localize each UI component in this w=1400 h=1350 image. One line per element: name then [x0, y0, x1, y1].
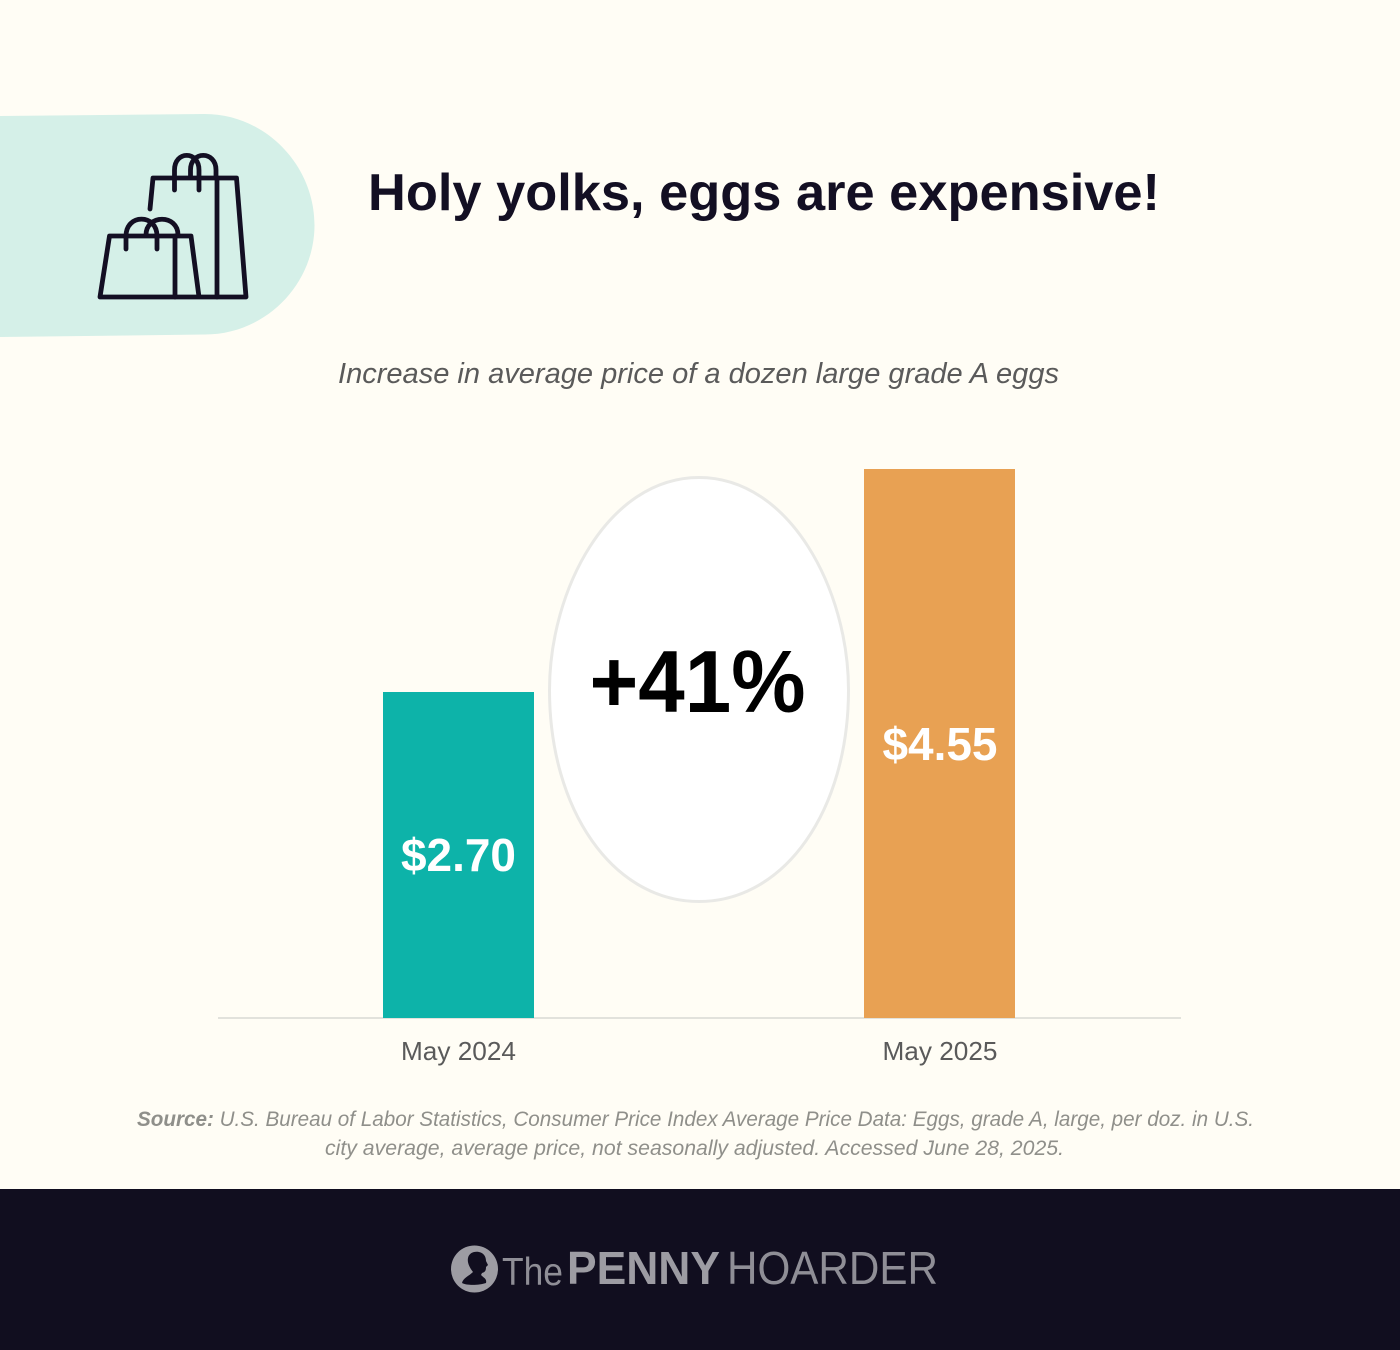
logo: The Penny Hoarder	[451, 1242, 938, 1294]
callout: egg with +41%	[550, 478, 848, 902]
logo: The Penny Hoarder: PENNY	[567, 1242, 720, 1294]
logo: The Penny Hoarder: HOARDER	[727, 1242, 938, 1294]
source note: city average, average price, not seasonally adjusted. Accessed June 28, 2025.	[325, 1137, 1064, 1160]
bar: May 2025	[864, 469, 1015, 1018]
bar: May 2024	[383, 692, 534, 1018]
axis label: May 2024: May 2024	[401, 1036, 516, 1066]
title: Holy yolks, eggs are expensive!	[368, 164, 1160, 222]
footer band	[0, 1189, 1400, 1350]
source note	[137, 1108, 1254, 1160]
bar: May 2024: $2.70	[401, 829, 516, 881]
callout: egg with +41%: +41%	[590, 632, 806, 731]
icon: portrait coin	[451, 1246, 498, 1292]
axis label: May 2025: May 2025	[882, 1036, 998, 1066]
subtitle: Increase in average price of a dozen large grade A eggs	[338, 358, 1059, 390]
icon: shopping bags on mint blob	[0, 114, 314, 337]
logo wordmark: The	[502, 1251, 563, 1294]
bar: May 2025: $4.55	[882, 718, 998, 770]
axis baseline	[218, 1017, 1181, 1019]
source note: Source: U.S. Bureau of Labor Statistics, Consumer Price Index Average Price Data: Eggs, grade A, large, per doz. in U.S.	[137, 1108, 1254, 1131]
bar chart	[218, 469, 1181, 1066]
